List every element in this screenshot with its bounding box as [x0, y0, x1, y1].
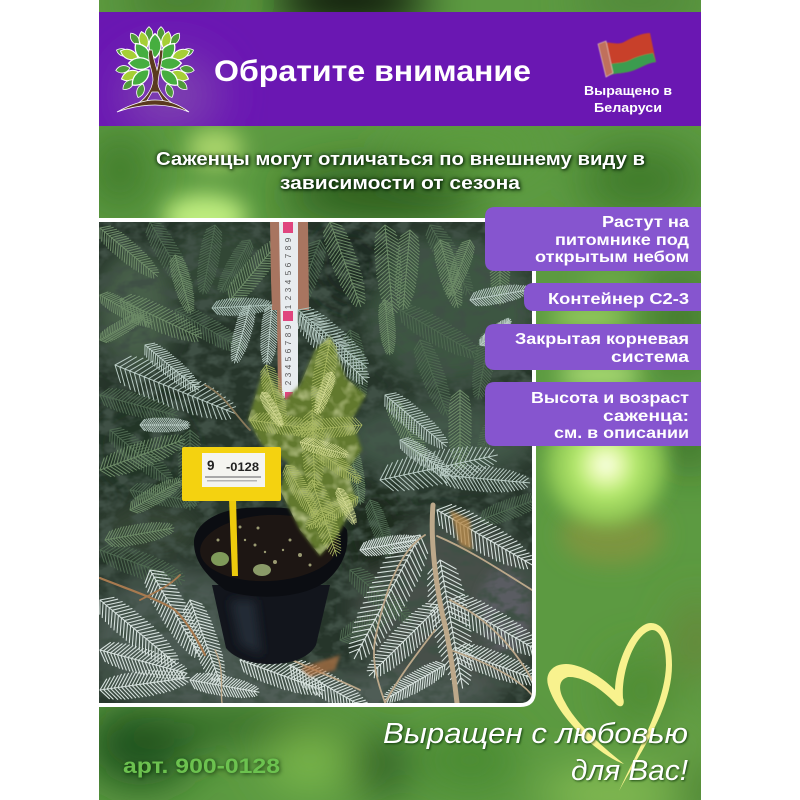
pot body	[212, 585, 330, 664]
title: Обратите внимание	[214, 55, 531, 88]
thuja foliage mass	[248, 336, 366, 556]
flag red field	[606, 32, 656, 74]
tape numbers: 2	[284, 295, 293, 300]
icon: Belarus flag	[598, 33, 656, 77]
article number: арт. 900-0128	[123, 755, 280, 778]
dark green upper fir branches	[93, 218, 510, 550]
label code: 9	[207, 458, 215, 473]
tape numbers: 9	[284, 324, 293, 329]
feature tag: height and age: Высота и возраст	[531, 390, 689, 407]
photo white frame	[99, 218, 536, 707]
made in Belarus caption: Беларуси	[594, 101, 662, 115]
tape numbers: 6	[284, 262, 293, 267]
photo: seedling in pot among fir branches	[99, 222, 532, 703]
black plant pot	[194, 507, 348, 664]
icon: yellow heart	[547, 623, 672, 791]
slogan	[383, 718, 688, 787]
tape numbers: 2	[284, 380, 293, 385]
feature tag: grown in nursery: Растут на	[602, 214, 689, 231]
subtitle: Саженцы могут отличаться по внешнему виду в	[156, 148, 645, 169]
feature tag: grown in nursery: открытым небом	[535, 249, 689, 266]
background filler fir branches	[96, 216, 549, 648]
pot body sheen	[230, 600, 262, 655]
header banner	[99, 12, 701, 135]
thuja seedling	[246, 334, 366, 557]
feature tag: height and age	[485, 382, 701, 446]
tree base curves	[117, 100, 189, 112]
icon: tree logo	[115, 27, 195, 112]
thuja feathery sprays	[249, 338, 365, 560]
silver branch across tape	[212, 297, 369, 371]
feature tag: closed root system	[485, 324, 701, 370]
tape numbers	[285, 238, 291, 385]
label stake	[229, 498, 238, 576]
tape numbers: 7	[284, 340, 293, 345]
tape numbers: 4	[284, 364, 293, 369]
slogan: Выращен с любовью	[383, 718, 688, 750]
flag green stripe	[610, 52, 656, 76]
feature tag: closed root system: система	[611, 349, 689, 366]
thuja highlight sprays	[257, 370, 360, 527]
silver fir branches lower	[99, 504, 532, 703]
soil	[200, 515, 338, 581]
subtitle	[156, 148, 645, 193]
orange dry needles and bare soil	[300, 510, 472, 677]
feature tag: grown in nursery	[485, 207, 701, 271]
soil specks and moss	[211, 526, 322, 576]
tree trunk	[138, 50, 172, 103]
pot rim	[194, 507, 348, 597]
tape numbers: 8	[284, 332, 293, 337]
slogan: для Вас!	[571, 755, 688, 787]
tape numbers: 4	[284, 279, 293, 284]
tape numbers: 5	[284, 270, 293, 275]
label plate	[182, 447, 281, 501]
feature tag: grown in nursery: питомнике под	[555, 232, 689, 249]
foliage dark mottling	[99, 222, 532, 703]
fir branch stems and twigs	[100, 385, 532, 703]
tape numbers: 3	[284, 287, 293, 292]
tape numbers: 1	[284, 304, 293, 309]
wooden measuring stake	[270, 222, 309, 398]
made in Belarus caption	[584, 84, 672, 115]
feature tag: container: Контейнер С2-3	[548, 291, 689, 308]
tape numbers: 7	[284, 253, 293, 258]
bokeh highlight	[538, 446, 675, 572]
feature tag: height and age: саженца:	[603, 408, 689, 425]
green bokeh background	[85, 0, 718, 800]
flag ornament strip	[598, 41, 613, 77]
tape pink markers	[283, 222, 293, 233]
label small print	[205, 476, 261, 478]
feature tag: container	[524, 283, 701, 311]
feature tag: height and age: см. в описании	[554, 425, 689, 442]
yellow plant label: -0128	[226, 462, 260, 474]
feature tag: closed root system: Закрытая корневая	[515, 331, 689, 348]
tape numbers: 3	[284, 372, 293, 377]
measuring tape	[279, 222, 298, 400]
banner glow behind logo	[120, 55, 220, 135]
thuja light texture	[248, 337, 366, 556]
made in Belarus caption: Выращено в	[584, 84, 672, 98]
photo background tones	[90, 222, 545, 717]
subtitle: зависимости от сезона	[280, 172, 521, 193]
tape numbers: 5	[284, 356, 293, 361]
tape numbers: 8	[284, 245, 293, 250]
tape numbers: 6	[284, 348, 293, 353]
label sticker	[202, 453, 265, 487]
silver fir branches upper	[108, 281, 531, 496]
tape numbers: 9	[284, 237, 293, 242]
yellow plant label	[182, 447, 281, 576]
banner fill	[99, 12, 701, 126]
tree leaves	[115, 27, 195, 99]
